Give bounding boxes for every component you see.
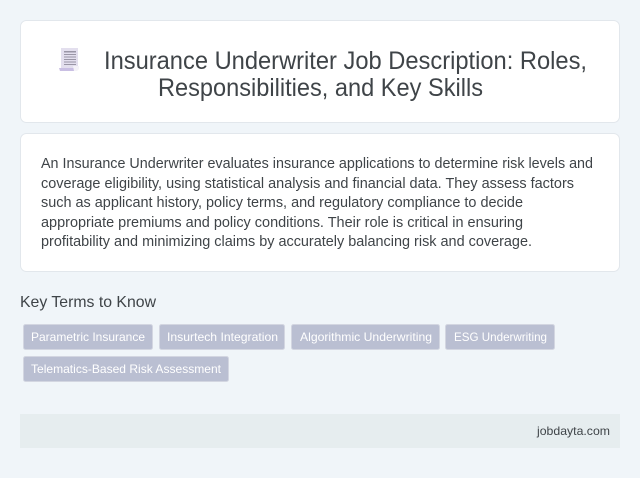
text block: description: such as applicant history, policy terms, and regulatory compliance to decide: [41, 195, 523, 211]
tag: insurtech integration: [160, 324, 284, 350]
tag: esg underwriting: ESG Underwriting: [454, 330, 547, 344]
title: [104, 47, 587, 102]
footer: jobdayta.com: [536, 424, 610, 438]
tag: parametric insurance: Parametric Insurance: [31, 330, 145, 344]
footer: [20, 414, 620, 448]
text block: description: profitability and minimizing claims by accurately balancing risk and coverage.: [41, 234, 532, 250]
tag: algorithmic underwriting: [292, 324, 440, 350]
tag: telematics-based risk assessment: Telematics-Based Risk Assessment: [31, 362, 222, 376]
tag: insurtech integration: Insurtech Integration: [167, 330, 278, 344]
tag: telematics-based risk assessment: [24, 356, 228, 382]
title: Responsibilities, and Key Skills: [158, 74, 483, 102]
text block: description: coverage eligibility, using statistical analysis and financial data. They assess factors: [41, 176, 574, 192]
tag: algorithmic underwriting: Algorithmic Underwriting: [300, 330, 432, 344]
tags: key terms: [24, 324, 554, 382]
heading: key terms: Key Terms to Know: [20, 294, 156, 311]
tag: esg underwriting: [446, 324, 554, 350]
icon: policy document scroll: [59, 48, 79, 71]
panel: description: [20, 134, 620, 272]
panel: title card: [20, 20, 620, 122]
text block: description: An Insurance Underwriter evaluates insurance applications to determine risk levels and: [41, 156, 593, 172]
tag: parametric insurance: [24, 324, 152, 350]
title: Insurance Underwriter Job Description: Roles,: [104, 47, 587, 75]
text block: description: [41, 156, 593, 250]
text block: description: appropriate premiums and policy conditions. Their role is critical in ensuring: [41, 215, 523, 231]
